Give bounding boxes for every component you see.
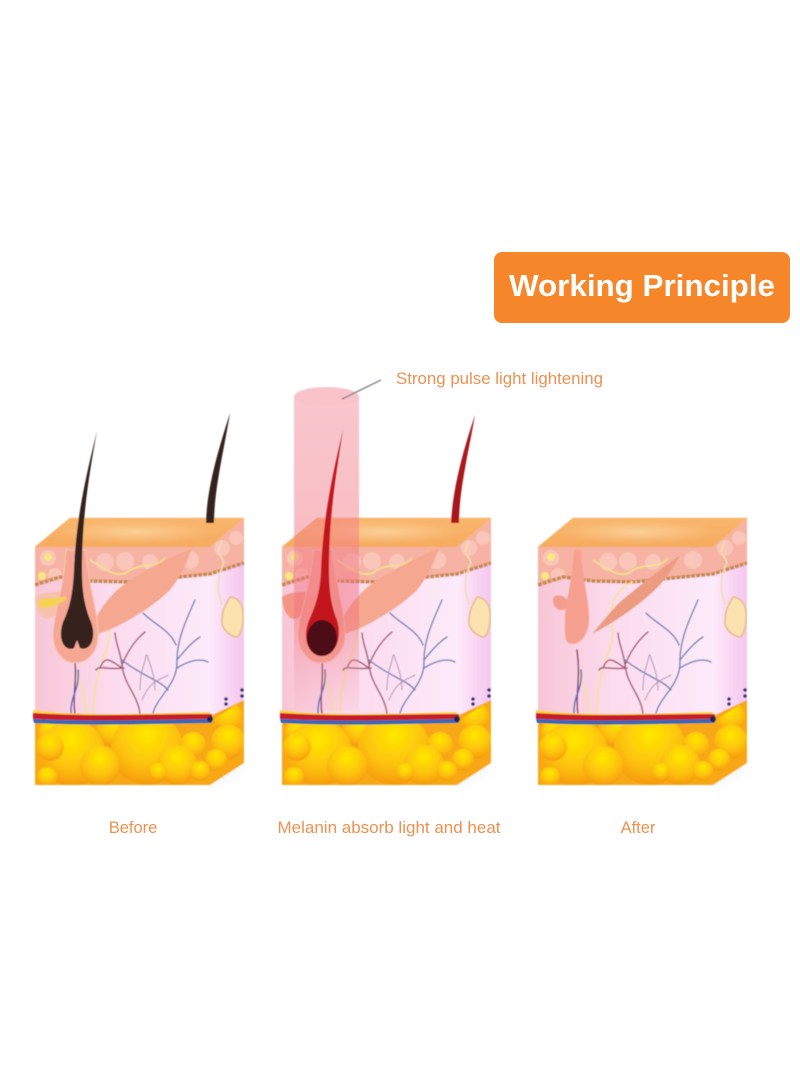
icon: heated hair shaft — [306, 430, 343, 656]
icon: follicle — [53, 550, 98, 663]
icon: second hair — [206, 413, 230, 523]
icon: muscle — [342, 548, 439, 634]
icon: second hair — [451, 415, 475, 523]
icon: sebaceous drop — [38, 596, 66, 608]
label: melanin: Melanin absorb light and heat — [278, 819, 501, 837]
panel: melanin absorb — [280, 380, 509, 797]
icon: oil gland — [35, 590, 68, 619]
title banner: Working Principle — [509, 268, 775, 303]
icon: muscle — [95, 548, 192, 634]
icon: follicle — [298, 550, 345, 663]
icon: oil gland — [282, 590, 315, 619]
panel: after — [536, 518, 765, 797]
icon: light beam — [294, 387, 359, 710]
arrow: beam pointer — [342, 380, 381, 399]
icon: muscle — [592, 555, 680, 634]
icon: empty follicle — [565, 550, 589, 644]
title banner — [494, 252, 790, 323]
panel: before — [33, 413, 262, 797]
label: strong pulse light: Strong pulse light lightening — [396, 370, 603, 388]
label: after: After — [621, 819, 656, 837]
label: before: Before — [109, 819, 157, 837]
icon: oil gland — [553, 595, 568, 610]
icon: dark bulb — [307, 620, 337, 656]
icon: hair shaft — [61, 431, 97, 649]
